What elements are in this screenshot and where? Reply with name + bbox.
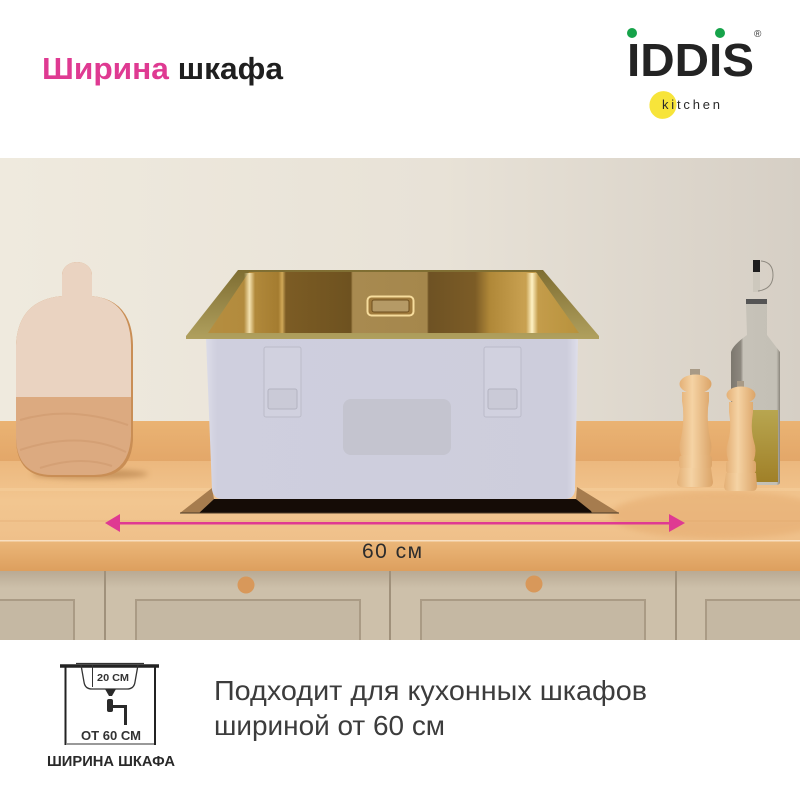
backsplash — [0, 421, 800, 461]
width arrow — [105, 514, 685, 532]
sink basin — [206, 338, 578, 499]
sink drain overflow — [368, 296, 414, 316]
cabinet width diagram — [47, 664, 176, 770]
cabinets — [0, 571, 800, 640]
diagram siphon — [105, 689, 127, 725]
diagram caption: ШИРИНА ШКАФА — [47, 754, 176, 770]
pepper mill large — [677, 369, 713, 487]
kitchen scene photo — [0, 158, 800, 640]
diagram sink — [76, 664, 144, 689]
description text — [214, 675, 647, 741]
yellow blob — [645, 87, 681, 123]
cutting board — [16, 262, 133, 477]
logo wordmark: IDDIS — [627, 34, 754, 86]
logo subtitle: kitchen — [662, 97, 720, 112]
sink cutout in countertop — [180, 487, 619, 514]
countertop — [0, 461, 800, 541]
logo green dots — [627, 28, 725, 38]
depth label: 20 СМ — [97, 672, 129, 684]
brand logo — [627, 28, 762, 123]
diagram countertop and cabinet walls — [60, 666, 159, 745]
left mounting clip — [264, 347, 301, 417]
label plate — [343, 399, 451, 455]
diagram depth arrow — [92, 665, 94, 687]
countertop front edge — [0, 540, 800, 571]
right mounting clip — [484, 347, 521, 417]
sink gold rim — [186, 270, 599, 339]
bottle — [731, 260, 780, 485]
registered mark: ® — [754, 29, 762, 40]
width label: 60 см — [362, 540, 422, 563]
width value label: ОТ 60 СМ — [81, 728, 141, 743]
board shadow — [32, 469, 148, 479]
description text: Подходит для кухонных шкафов — [214, 675, 647, 706]
description text: шириной от 60 см — [214, 710, 445, 741]
diagram width arrow — [67, 743, 154, 745]
title: Ширина шкафа — [42, 51, 284, 86]
wall — [0, 158, 800, 422]
pepper mill small — [724, 381, 757, 491]
cabinet knobs — [238, 576, 542, 594]
